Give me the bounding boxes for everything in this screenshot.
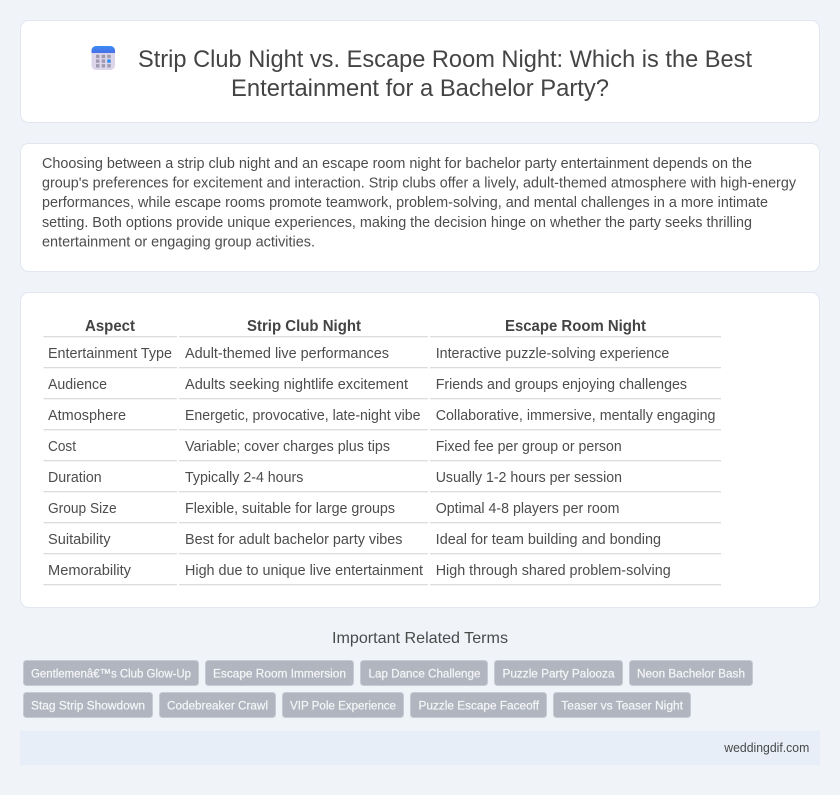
tag: Gentlemen's Club Glow-Up	[24, 660, 198, 686]
tag: Codebreaker Crawl	[160, 692, 276, 718]
footer	[20, 731, 820, 765]
table row: Suitability: Best for adult bachelor party vibes	[185, 532, 402, 548]
table row: Group Size: Optimal 4-8 players per room	[436, 501, 620, 517]
tag: Puzzle Party Palooza	[494, 660, 622, 686]
tag: Lap Dance Challenge	[360, 660, 488, 686]
text block: introduction paragraph: group's preferences for excitement and interaction. Strip clubs offer a lively, adult-themed atmosphere with high-energy	[42, 176, 797, 192]
table row: Memorability: High through shared problem-solving	[436, 563, 671, 579]
table row: Entertainment Type: Adult-themed live performances	[185, 346, 389, 362]
table row: Atmosphere: Collaborative, immersive, mentally engaging	[436, 408, 716, 424]
text block: introduction paragraph: performances, while escape rooms promote teamwork, problem-solving, and mental challenges in a more intimate	[42, 195, 768, 211]
table row: Atmosphere: Atmosphere	[48, 408, 126, 424]
table row: Atmosphere	[44, 408, 721, 430]
table row: Audience	[44, 377, 721, 399]
tag: VIP Pole Experience	[282, 692, 404, 718]
heading: important related terms: Important Related Terms	[332, 630, 508, 647]
tag: Puzzle Escape Faceoff	[410, 692, 546, 718]
text block: introduction paragraph: setting. Both options provide unique experiences, making the decision hinge on whether the party seeks thrilling	[42, 215, 752, 231]
table row: Duration: Usually 1-2 hours per session	[436, 470, 622, 486]
text block: introduction paragraph: entertainment or engaging group activities.	[42, 234, 315, 250]
table row: Audience: Adults seeking nightlife excitement	[185, 377, 408, 393]
table header row: Escape Room Night	[505, 318, 646, 335]
table row: Group Size: Flexible, suitable for large groups	[185, 501, 395, 517]
table header row: Aspect	[85, 318, 135, 335]
text block: introduction paragraph: Choosing between a strip club night and an escape room night for bachelor party entertainment depends on the	[42, 156, 752, 172]
table row: Entertainment Type	[44, 346, 721, 368]
icon: calendar	[92, 46, 115, 70]
tag: Puzzle Escape Faceoff: Puzzle Escape Faceoff	[418, 698, 540, 712]
table row: Memorability: Memorability	[48, 563, 132, 579]
table row: Memorability: High due to unique live entertainment	[185, 563, 423, 579]
tag: Stag Strip Showdown	[24, 692, 152, 718]
table header row	[44, 318, 721, 337]
table row: Duration: Typically 2-4 hours	[185, 470, 303, 486]
text block: introduction paragraph	[42, 156, 797, 250]
title: Strip Club Night vs. Escape Room Night: Which is the Best	[138, 46, 752, 73]
table row: Atmosphere: Energetic, provocative, late-night vibe	[185, 408, 420, 424]
table row: Duration	[44, 470, 721, 492]
tag: Neon Bachelor Bash	[630, 660, 752, 686]
tag: Stag Strip Showdown: Stag Strip Showdown	[31, 698, 145, 712]
table row: Duration: Duration	[48, 470, 102, 486]
tag: Puzzle Party Palooza: Puzzle Party Palooza	[502, 666, 615, 680]
tag: Codebreaker Crawl: Codebreaker Crawl	[167, 698, 268, 712]
table row: Entertainment Type: Entertainment Type	[48, 346, 172, 362]
tag: Escape Room Immersion	[206, 660, 354, 686]
tag: Neon Bachelor Bash: Neon Bachelor Bash	[637, 666, 745, 680]
table row: Suitability	[44, 532, 721, 554]
table row: Entertainment Type: Interactive puzzle-solving experience	[436, 346, 669, 362]
table row: Cost: Variable; cover charges plus tips	[185, 439, 390, 455]
panel: header	[20, 20, 820, 122]
panel: comparison table	[20, 292, 820, 608]
table row: Cost: Fixed fee per group or person	[436, 439, 622, 455]
title: Entertainment for a Bachelor Party?	[231, 75, 609, 102]
tag: Escape Room Immersion: Escape Room Immersion	[213, 666, 346, 680]
tag: Teaser vs Teaser Night	[554, 692, 690, 718]
tag: VIP Pole Experience: VIP Pole Experience	[290, 698, 396, 712]
table row: Audience: Audience	[48, 377, 107, 393]
table row: Suitability: Suitability	[48, 532, 111, 548]
table row: Audience: Friends and groups enjoying challenges	[436, 377, 687, 393]
tag: Lap Dance Challenge: Lap Dance Challenge	[368, 666, 481, 680]
footer source text: weddingdif.com	[723, 741, 809, 755]
tag: Gentlemen's Club Glow-Up: Gentlemenâ€™s Club Glow-Up	[31, 666, 191, 680]
table row: Cost	[44, 439, 721, 461]
related term tags	[24, 660, 752, 718]
table header row: Strip Club Night	[247, 318, 361, 335]
table row: Cost: Cost	[48, 439, 76, 455]
table row: Memorability	[44, 563, 721, 585]
panel: introduction	[20, 144, 820, 272]
table row: Group Size	[44, 501, 721, 523]
tag: Teaser vs Teaser Night: Teaser vs Teaser Night	[561, 698, 684, 712]
title	[138, 46, 752, 102]
table row: Suitability: Ideal for team building and bonding	[436, 532, 661, 548]
table row: Group Size: Group Size	[48, 501, 117, 517]
